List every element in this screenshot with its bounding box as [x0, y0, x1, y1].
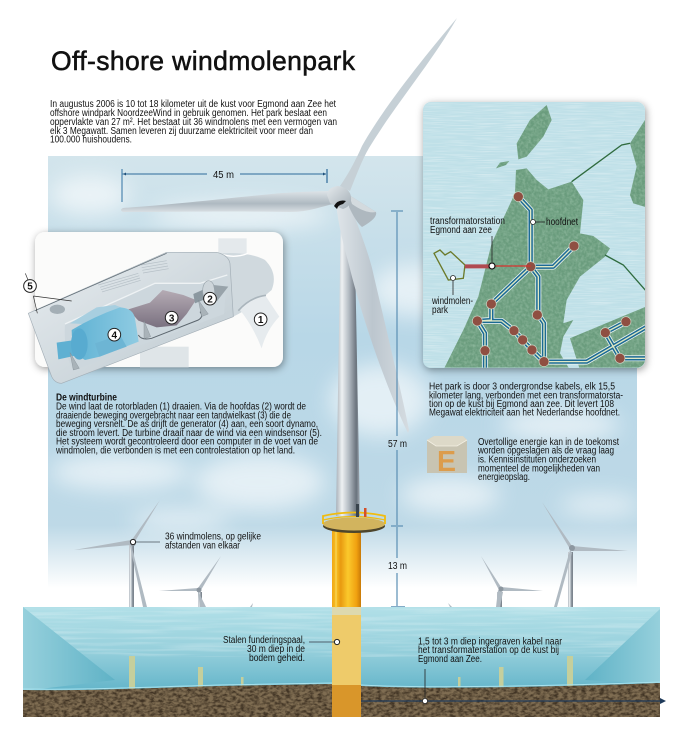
blade root paddle [349, 195, 376, 227]
map labels: park [432, 305, 449, 316]
map marker: transformer station [489, 236, 495, 269]
main shaft and disk [193, 287, 213, 303]
map labels: Egmond aan zee [430, 225, 492, 236]
main turbine blades and hub [121, 18, 457, 433]
text: de windturbine [55, 392, 322, 456]
text: energy storage: worden opgeslagen als de vraag laag [477, 446, 614, 456]
cutaway interior [65, 275, 227, 371]
map marker: wind farm [450, 276, 456, 295]
sky background with clouds [48, 156, 640, 609]
measure: 13 m [388, 526, 407, 607]
high-voltage grid [477, 197, 650, 370]
background turbines [74, 500, 628, 607]
marker 3 [165, 311, 178, 324]
callout: foundation pile: 30 m diep in de [247, 644, 305, 655]
callout: 36 windmills [130, 532, 261, 552]
seabed [23, 683, 660, 717]
generator [57, 340, 78, 359]
measure: 45 m [122, 169, 327, 202]
icon: energy box: E [437, 446, 456, 478]
nacelle shell [28, 252, 233, 383]
callout: foundation pile [223, 635, 340, 664]
supports [70, 300, 208, 370]
panel: nacelle detail [24, 232, 283, 383]
tower stub [140, 347, 189, 367]
marker 1 [254, 313, 267, 326]
export cable [465, 264, 490, 268]
callout: buried cable [361, 636, 666, 704]
intro text: oppervlakte van 27 m². Het bestaat uit 36 windmolens met een vermogen van [50, 117, 337, 128]
marker 4: 4 [112, 330, 118, 341]
marker 2 [204, 292, 216, 305]
text: park cables: Megawat elektriciteit aan het Nederlandse hoofdnet. [429, 408, 620, 418]
dikes [572, 143, 647, 292]
wind farm outline [434, 250, 465, 280]
turbine far right [542, 502, 628, 607]
text: de windturbine: die stroom levert. De turbine draait naar de wind via een windsensor (5). [56, 428, 322, 439]
measure: 13 m: 13 m [388, 561, 407, 572]
text: energy storage: momenteel de mogelijkheden van [478, 464, 600, 474]
text: park cables: tion op de kust bij Egmond aan zee. Dit levert 108 [429, 399, 614, 410]
text: energy storage: is. Kennisinstituten onderzoeken [478, 454, 596, 466]
map labels: hoofdnet [546, 217, 578, 228]
base frame [138, 312, 202, 339]
gearbox [128, 290, 196, 327]
marker 3: 3 [169, 313, 175, 324]
marker 2: 2 [207, 294, 213, 305]
marker 1: 1 [258, 315, 264, 326]
intro text: elk 3 Megawatt. Samen leveren zij duurzame elektriciteit voor meer dan [50, 126, 313, 137]
turbine second right [481, 556, 543, 607]
foundation piles [129, 656, 573, 690]
map marker: main grid [530, 220, 545, 224]
text: de windturbine: De wind laat de rotorbladen (1) draaien. Via de hoofdas (2) wordt de [56, 402, 306, 412]
callout: buried cable: het transformaterstation op de kust bij [418, 645, 559, 656]
platform [323, 504, 385, 533]
callout: foundation pile: Stalen funderingspaal, [223, 635, 305, 646]
measure: 57 m: 57 m [388, 439, 407, 450]
callout: buried cable: Egmond aan Zee. [418, 654, 482, 665]
blade up [340, 18, 457, 191]
callout: 36 windmills: 36 windmolens, op gelijke [165, 532, 261, 542]
callout: buried cable: 1,5 tot 3 m diep ingegraven kabel naar [418, 636, 563, 648]
main turbine tower [336, 205, 360, 516]
title: Off-shore windmolenpark [51, 46, 356, 76]
map labels [430, 216, 578, 316]
substations [472, 192, 631, 367]
turbine far left [74, 500, 160, 607]
sea panel [23, 607, 660, 717]
intro text: In augustus 2006 is 10 tot 18 kilometer uit de kust voor Egmond aan Zee het [50, 99, 336, 110]
blade down [336, 203, 409, 433]
panel: map of Noord-Holland [420, 100, 650, 370]
spinner [220, 253, 274, 317]
marker 5 with leader lines: 5 [27, 282, 33, 293]
hub [327, 186, 351, 209]
map land [443, 105, 650, 370]
text: park cables [429, 382, 623, 418]
intro text: 100.000 huishoudens. [50, 134, 132, 146]
intro text: offshore windpark NoordzeeWind in gebruik genomen. Het park beslaat een [50, 108, 327, 119]
callout: foundation pile: bodem geheid. [249, 653, 305, 664]
map water [420, 100, 650, 370]
map labels: transformatorstation [430, 216, 505, 227]
sensor hole [50, 305, 65, 314]
text: de windturbine: De windturbine [56, 392, 117, 404]
blade root 1 [240, 296, 279, 348]
text: energy storage: energieopslag. [478, 472, 530, 483]
vents [98, 261, 169, 292]
callout: 36 windmills: afstanden van elkaar [165, 540, 241, 552]
measure: 45 m: 45 m [213, 170, 234, 181]
turbine second left [159, 556, 221, 607]
blade left [121, 191, 334, 212]
map labels: windmolen- [431, 296, 473, 307]
foundation pile and platform [323, 504, 385, 717]
text: park cables: kilometer lang, verbonden met een transformatorsta- [429, 390, 623, 402]
icon: energy box [427, 436, 467, 478]
text: de windturbine: Het systeem wordt gecontroleerd door een computer in de voet van de [56, 436, 318, 448]
text: de windturbine: draaiende beweging overgebracht naar een tandwielkast (3) die de [56, 410, 291, 422]
intro text [50, 99, 337, 146]
text: de windturbine: windmolen, die verbonden is met een controlestation op het land. [55, 446, 295, 456]
text: energy storage: Overtollige energie kan in de toekomst [478, 437, 619, 448]
text: de windturbine: beweging versnelt. De as drijft de generator (4) aan, een soort dynamo, [56, 419, 318, 430]
marker 4 [108, 328, 121, 341]
distant blade tips [250, 603, 452, 607]
marker 5 with leader lines [24, 273, 72, 313]
text: park cables: Het park is door 3 ondergrondse kabels, elk 15,5 [429, 382, 615, 392]
text: energy storage [477, 437, 619, 483]
